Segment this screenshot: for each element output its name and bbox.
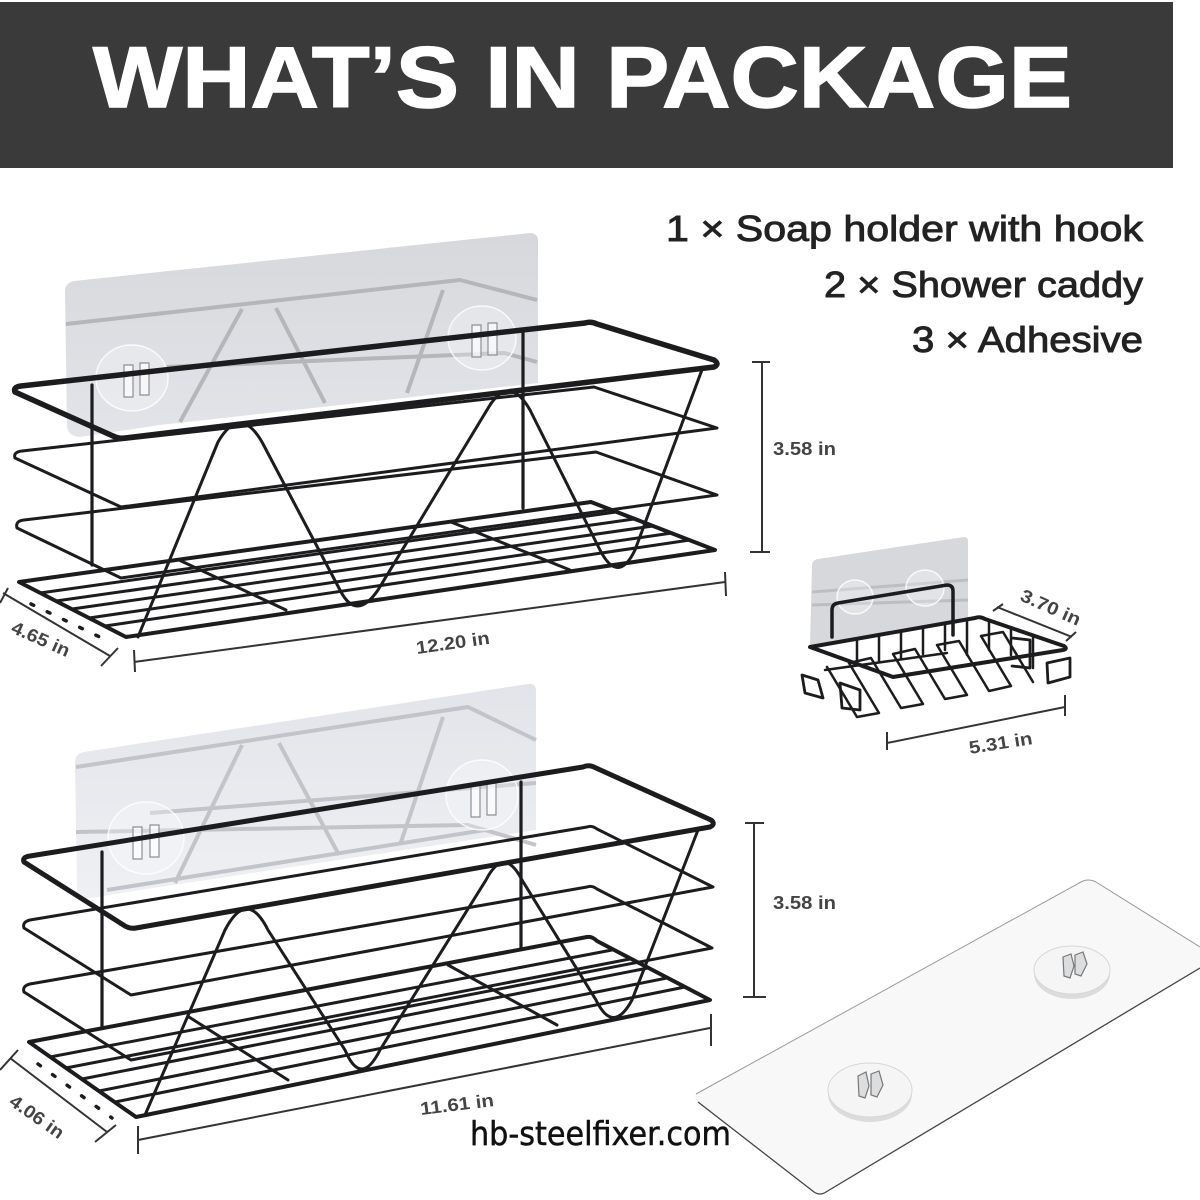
- loose adhesive panel: [695, 880, 1200, 1194]
- dimension: large caddy height: 3.58 in: [773, 439, 836, 459]
- package contents list: 3 × Adhesive: [912, 319, 1143, 360]
- dimension: large caddy length: [134, 572, 726, 672]
- adhesive hook disc: [828, 1063, 912, 1122]
- soap holder with hook: [802, 537, 1070, 717]
- dimension: large caddy height: [750, 362, 836, 552]
- dimension: medium caddy depth: [0, 1050, 116, 1143]
- wire frame: [24, 766, 713, 1118]
- package contents list: [666, 208, 1144, 360]
- shower caddy, large, with adhesive panel: [15, 233, 717, 640]
- suction hooks: [108, 760, 518, 874]
- adhesive panel behind large caddy: [65, 233, 538, 437]
- dimension: large caddy depth: [0, 588, 118, 666]
- dimension: soap holder depth: 3.70 in: [1017, 585, 1084, 630]
- dimension: large caddy depth: 4.65 in: [8, 617, 73, 661]
- title banner: WHAT’S IN PACKAGE: [93, 30, 1072, 126]
- dimension: medium caddy height: 3.58 in: [773, 893, 836, 913]
- wire frame: [802, 585, 1070, 717]
- dimension: medium caddy depth: 4.06 in: [6, 1091, 68, 1143]
- watermark text: hb-steelfixer.com: [470, 1114, 731, 1153]
- dimension: soap holder depth: [993, 585, 1084, 641]
- dimension: large caddy length: 12.20 in: [415, 628, 491, 658]
- suction hooks: [837, 570, 944, 614]
- package contents list: 2 × Shower caddy: [824, 264, 1143, 305]
- shower caddy, medium, with adhesive panel: [24, 684, 713, 1118]
- dimension: medium caddy length: [138, 1014, 711, 1154]
- dimension: soap holder width: [887, 695, 1065, 758]
- dimension: medium caddy height: [743, 823, 836, 997]
- package contents list: 1 × Soap holder with hook: [666, 208, 1144, 249]
- suction hooks: [96, 306, 516, 411]
- adhesive panel behind soap holder: [810, 537, 968, 645]
- dimension: medium caddy length: 11.61 in: [419, 1090, 495, 1119]
- adhesive panel behind medium caddy: [75, 684, 536, 899]
- title banner: [0, 2, 1173, 168]
- adhesive hook disc: [1034, 946, 1110, 999]
- wire frame: [15, 322, 717, 640]
- dimension: soap holder width: 5.31 in: [967, 728, 1034, 758]
